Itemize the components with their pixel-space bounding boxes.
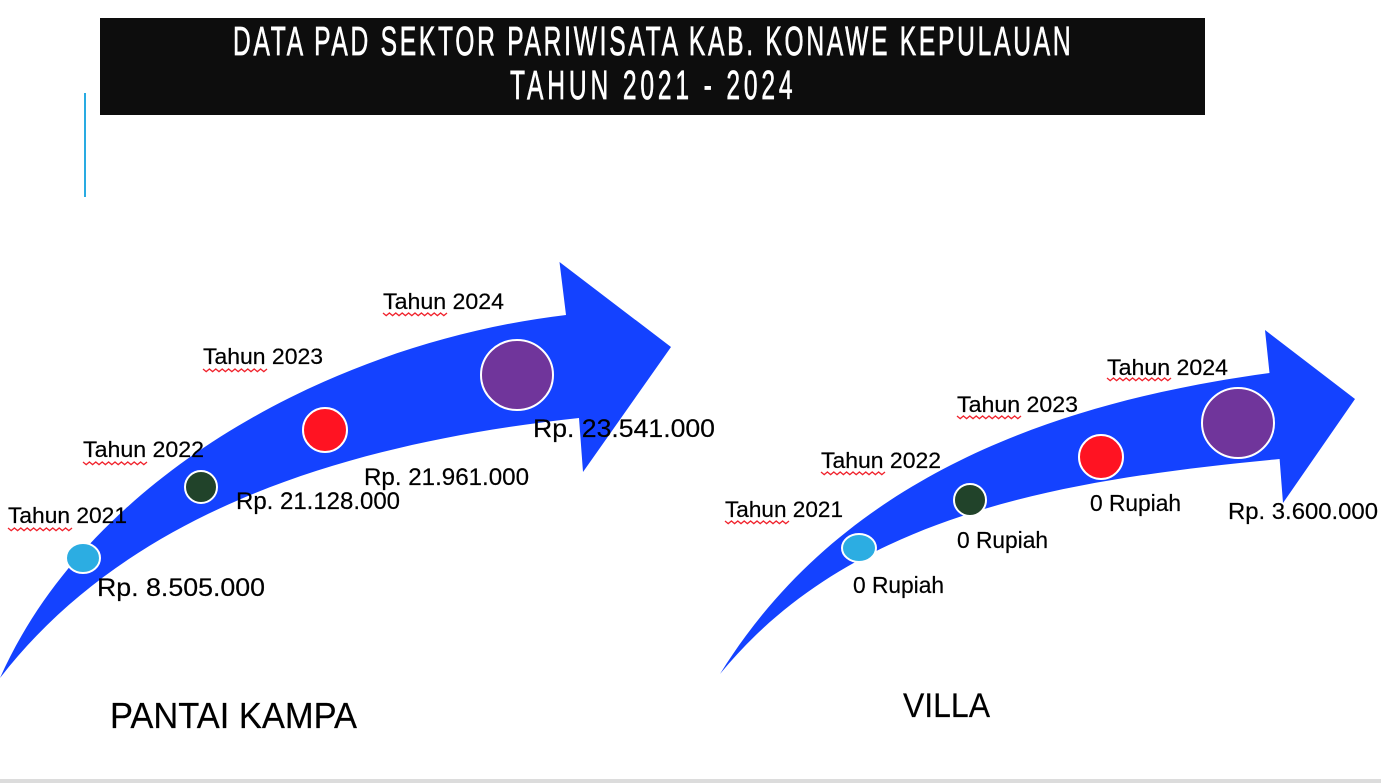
arrow: Villa growth — [720, 330, 1355, 674]
value: 2022: Rp. 21.128.000 — [236, 488, 400, 515]
label: Tahun 2021: Tahun 2021 — [8, 503, 127, 528]
value: 2021: 0 Rupiah — [853, 572, 944, 598]
value: 2023: Rp. 21.961.000 — [364, 464, 529, 491]
value: 2021: Rp. 8.505.000 — [97, 574, 265, 602]
value: 2022: 0 Rupiah — [957, 527, 1048, 553]
heading: Villa: VILLA — [903, 687, 990, 725]
marker: 2021 — [66, 543, 100, 573]
marker: 2024 — [1202, 388, 1274, 458]
label: Tahun 2023: Tahun 2023 — [957, 392, 1078, 417]
title banner: TAHUN 2021 - 2024 — [510, 63, 793, 109]
title banner — [100, 18, 1205, 115]
value: 2023: 0 Rupiah — [1090, 490, 1181, 516]
marker: 2022 — [185, 471, 217, 503]
marker: 2023 — [1079, 435, 1123, 479]
panel: Villa — [720, 330, 1378, 725]
label: Tahun 2023: Tahun 2023 — [203, 344, 323, 369]
arrow: Pantai Kampa growth — [0, 262, 671, 678]
marker: 2021 — [842, 534, 876, 562]
accent line — [84, 93, 86, 197]
marker: 2023 — [303, 408, 347, 452]
marker: 2022 — [954, 484, 986, 516]
bottom edge bar — [0, 779, 1381, 783]
panel: Pantai Kampa — [0, 262, 715, 736]
marker: 2024 — [481, 340, 553, 410]
label: Tahun 2022: Tahun 2022 — [83, 437, 204, 462]
value: 2024: Rp. 3.600.000 — [1228, 498, 1378, 524]
heading: Pantai Kampa: PANTAI KAMPA — [110, 695, 357, 736]
label: Tahun 2024: Tahun 2024 — [1107, 355, 1228, 380]
label: Tahun 2021: Tahun 2021 — [725, 497, 843, 522]
value: 2024: Rp. 23.541.000 — [533, 415, 715, 443]
title banner: DATA PAD SEKTOR PARIWISATA KAB. KONAWE KEPULAUAN — [233, 19, 1071, 65]
label: Tahun 2024: Tahun 2024 — [383, 289, 504, 314]
label: Tahun 2022: Tahun 2022 — [821, 448, 941, 473]
